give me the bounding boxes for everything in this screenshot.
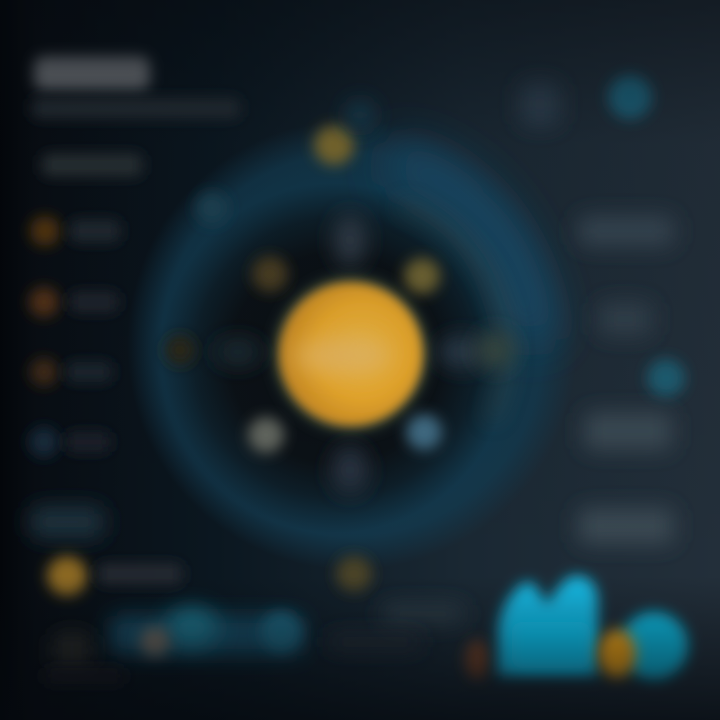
list item 2 bbox=[29, 287, 118, 317]
highlighted item bbox=[47, 556, 182, 596]
right column bbox=[328, 75, 685, 650]
top right teal dot bbox=[608, 75, 652, 119]
small cyan mound bbox=[620, 612, 688, 680]
bottom spoke bbox=[332, 446, 368, 494]
list item 3 bbox=[30, 358, 112, 386]
dark inner disc bbox=[160, 183, 510, 533]
title bbox=[34, 56, 150, 90]
top right grey block bbox=[520, 82, 560, 126]
orbital diagram bbox=[127, 101, 577, 592]
list item 1 bbox=[30, 216, 120, 246]
central sun bbox=[273, 276, 429, 432]
large cyan shape bbox=[498, 576, 598, 676]
top left node bbox=[252, 256, 288, 292]
left node bbox=[165, 335, 195, 365]
teal right peak bbox=[261, 612, 301, 652]
upper right halo glow bbox=[390, 160, 535, 340]
right outer node bbox=[477, 332, 513, 368]
right teal dot bbox=[647, 359, 685, 397]
bottom right chart bbox=[465, 576, 688, 680]
list item 5 bbox=[30, 506, 104, 538]
tan marker bbox=[140, 627, 170, 657]
bottom left node bbox=[248, 417, 284, 453]
top blue satellite bbox=[346, 101, 374, 129]
right text 2 bbox=[598, 302, 652, 336]
right text 4 bbox=[578, 508, 674, 544]
list item 4 bbox=[29, 427, 110, 457]
bottom middle text line bbox=[328, 634, 422, 650]
top spoke bbox=[334, 214, 366, 266]
heading bbox=[42, 154, 142, 176]
left spoke bbox=[214, 338, 262, 366]
orange mound bbox=[598, 630, 636, 678]
blue halo bbox=[127, 120, 577, 570]
lower left block bbox=[54, 634, 90, 668]
top satellite bbox=[314, 125, 354, 165]
right text 3 bbox=[584, 412, 672, 450]
bottom middle text bbox=[382, 604, 464, 624]
bottom right node bbox=[406, 414, 442, 450]
outer orbit ring bbox=[400, 205, 507, 420]
bottom satellite bbox=[336, 556, 372, 592]
right text 1 bbox=[578, 216, 674, 246]
teal band bbox=[110, 616, 304, 656]
bottom left chart bbox=[44, 608, 304, 684]
top right node bbox=[404, 258, 440, 294]
right spoke bbox=[438, 336, 486, 368]
upper left blue node bbox=[196, 192, 228, 224]
brown bar bbox=[465, 640, 489, 680]
teal peak bbox=[166, 608, 218, 648]
bright cyan core bbox=[512, 622, 590, 668]
lower caption bbox=[44, 668, 124, 684]
left column bbox=[29, 56, 240, 596]
subtitle bbox=[32, 98, 240, 118]
